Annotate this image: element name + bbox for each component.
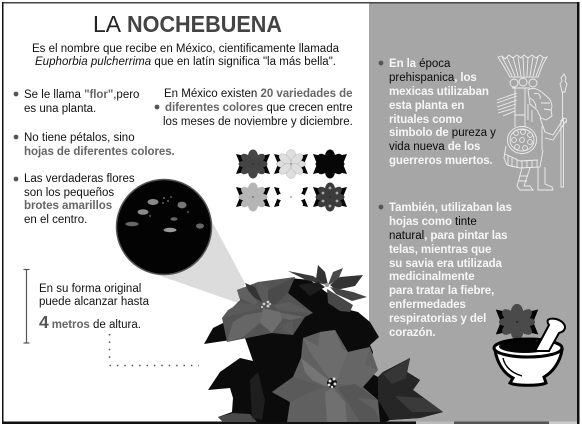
icon: black flower [313,150,347,178]
text block: tinte natural: enfermedades [389,299,466,311]
text block: tinte natural: natural, para pintar las [389,230,507,242]
text block: epoca prehispanica: vida nueva de los [389,141,480,153]
rim [494,339,562,357]
intro text: Es el nombre que recibe en México, cientificamente llamada [32,43,340,55]
intro text [32,43,340,68]
dark foliage [204,278,443,422]
text block: tinte natural: su savia era utilizada [389,258,503,270]
background panel: gray history column [369,3,577,422]
text block: variedades: diferentes colores que crecen entre [165,102,353,114]
text block: flores verdaderas: en el centro. [24,214,87,226]
text block: flor: es una planta. [24,103,96,115]
side feathers [497,93,517,116]
big lower flower [272,330,380,422]
text block: epoca prehispanica: guerreros muertos. [389,155,493,167]
text block: epoca prehispanica: esta planta en [389,100,464,112]
text block: petalos [14,132,175,158]
height bracket [24,269,30,343]
text block: epoca prehispanica [379,58,496,167]
text block: tinte natural: También, utilizaban las [389,202,512,214]
text block: tinte natural: corazón. [389,327,436,339]
title: NOCHEBUENA [127,11,282,37]
text block: altura: 4 metros de altura. [39,312,141,332]
top right flower [288,265,367,312]
text block: tinte natural: para tratar la fiebre, [389,285,494,297]
magnifier cone [155,216,245,303]
spear [561,120,564,187]
text block: variedades: En México existen 20 variedades de [164,88,352,100]
legs and feet [517,168,533,190]
magnified center circle [116,180,212,274]
torso and arm [540,118,566,150]
icon: white flower [274,182,308,212]
icon: mortar with flower [494,304,565,385]
icon: medium gray flower [236,182,270,212]
poinsettia plant [204,265,443,422]
title: LA [93,11,121,37]
text block: flores verdaderas: Las verdaderas flores [24,173,135,185]
flower in mortar [496,304,538,340]
icon: mexica warrior [497,55,567,190]
headdress feathers [498,55,547,77]
dotted leader line [110,334,199,366]
text block: altura: En su forma original [39,283,141,295]
text block: flor [14,89,139,115]
text block: petalos: hojas de diferentes colores. [24,146,175,158]
text block: altura: puede alcanzar hasta [39,296,150,308]
text block: epoca prehispanica: rituales como [389,114,463,126]
text block: variedades [155,88,353,128]
text block: flores verdaderas: son los pequeños [24,187,114,199]
head and headgear [528,88,552,120]
text block: tinte natural: medicinalmente [389,271,475,283]
text block: tinte natural: respiratorias y del [389,313,486,325]
pestle [535,319,565,351]
icon: dark gray flower [236,150,270,178]
text block: epoca prehispanica: prehispanica, los [389,72,477,84]
text block: tinte natural: telas, mientras que [389,244,491,256]
skirt [504,146,543,168]
text block: tinte natural: hojas como tinte [389,216,477,228]
icon: light flower [274,150,308,178]
intro text: Euphorbia pulcherrima que en latín significa "la más bella". [35,56,336,68]
text block: tinte natural [379,202,512,339]
text block: altura [39,283,150,332]
pole [512,88,530,127]
main flower [222,277,313,342]
text block: variedades: los meses de noviembre y diciembre. [163,116,353,128]
text block: epoca prehispanica: mexicas utilizaban [389,86,489,98]
flower color varieties [236,150,347,212]
bowl body [495,350,562,385]
shield [508,126,536,154]
text block: epoca prehispanica: En la época [389,58,451,70]
text block: epoca prehispanica: simbolo de pureza y [389,127,496,139]
text block: flores verdaderas [14,173,135,226]
text block: flores verdaderas: brotes amarillos [24,200,112,212]
text block: flor: Se le llama "flor",pero [24,89,139,101]
text block: petalos: No tiene pétalos, sino [24,132,135,144]
icon: variegated flower [313,182,347,212]
